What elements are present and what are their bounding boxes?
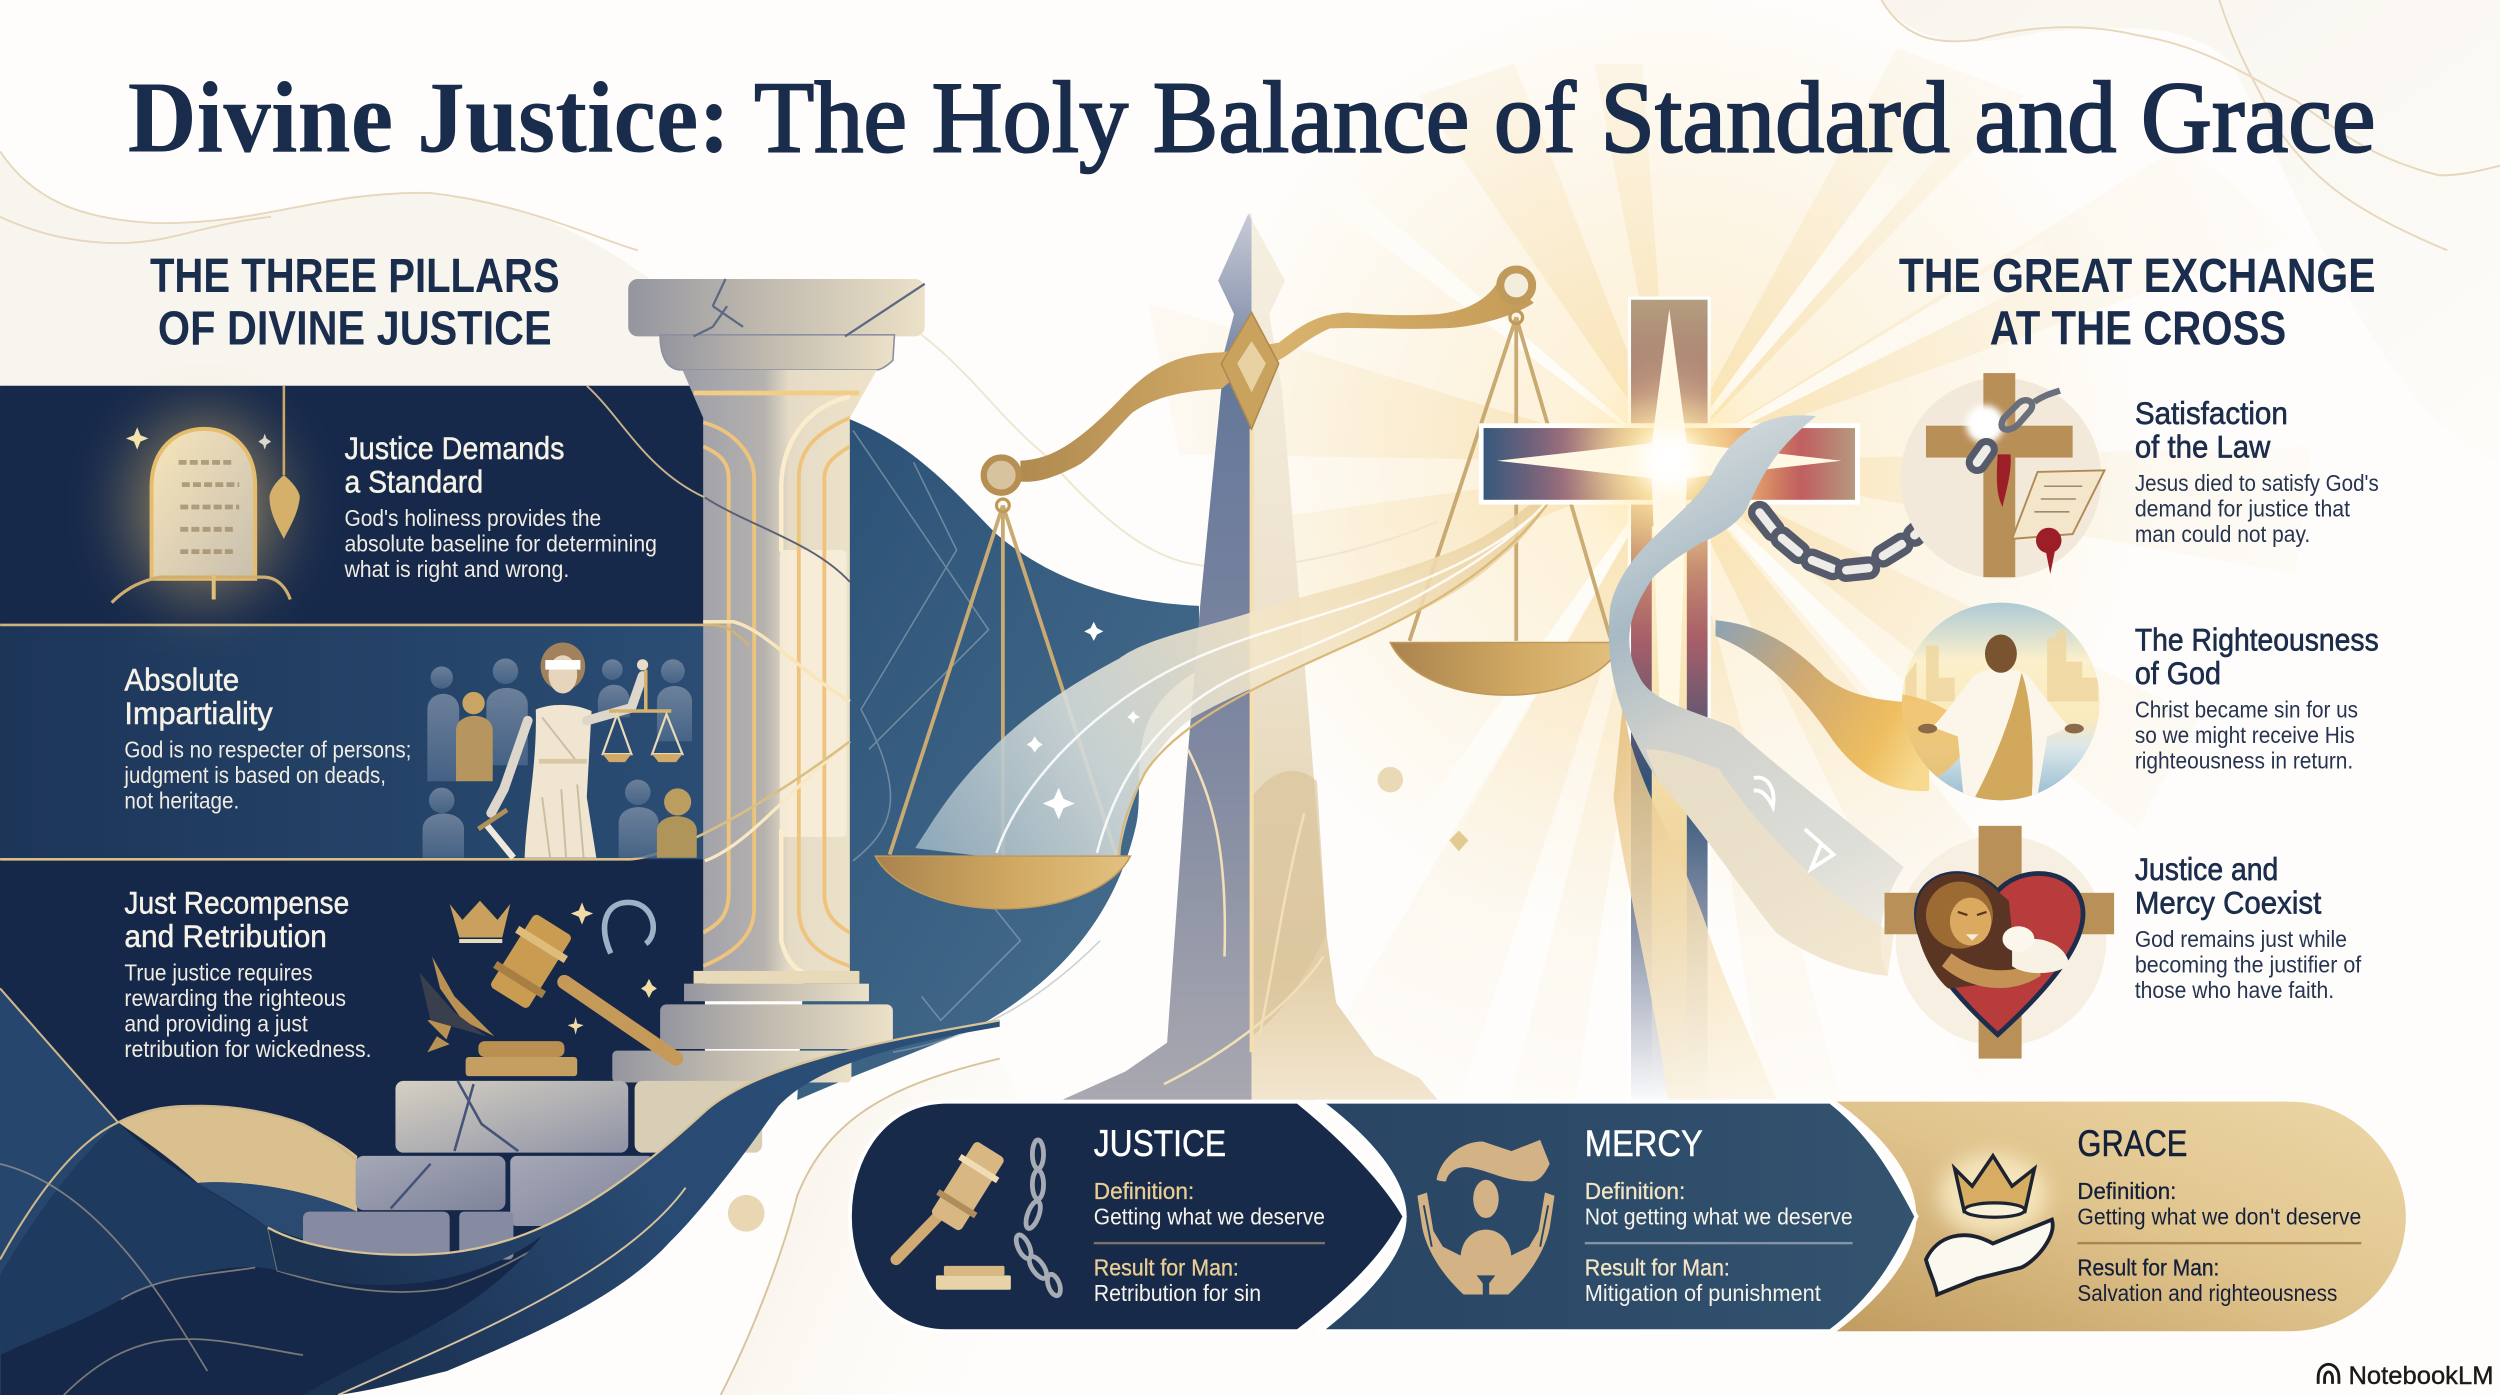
text: righteousness of god [2135,621,2379,773]
stone steps [303,1081,762,1259]
text: justice and mercy coexist: those who have faith. [2135,977,2334,1003]
scale beam and left pan strings [890,269,1610,855]
heading: three pillars: THE THREE PILLARS [150,250,560,303]
notebooklm logo: NotebookLM [2348,1363,2494,1390]
text: absolute impartiality: God is no respecter of persons; [124,736,411,762]
grace text: Definition: [2077,1178,2176,1204]
text: justice demands a standard: God's holiness provides the [344,505,601,531]
stone column [612,279,925,1083]
text: satisfaction of the law: man could not pay. [2135,521,2310,547]
grace text: Result for Man: [2077,1254,2219,1280]
grace text: Salvation and righteousness [2077,1280,2337,1306]
divider lines on the panels [0,386,850,859]
text: absolute impartiality: not heritage. [124,787,239,813]
text: absolute impartiality: Impartiality [124,695,273,731]
text: righteousness of god: so we might receive His [2135,722,2355,748]
text: satisfaction of the law: Satisfaction [2135,395,2288,431]
icon: gavel, crown and broken shackle [419,901,676,1076]
mercy text: Not getting what we deserve [1585,1203,1853,1229]
text: righteousness of god: The Righteousness [2135,621,2379,657]
text: justice and mercy coexist: God remains just while [2135,926,2347,952]
mercy text: Result for Man: [1585,1254,1730,1280]
mercy text [1585,1123,1853,1306]
text: justice and mercy coexist: Mercy Coexist [2135,885,2321,921]
lower-left waves and gold hill [0,988,702,1395]
right scale pan [1390,642,1623,695]
justice text: Retribution for sin [1094,1280,1261,1306]
text: justice and mercy coexist: Justice and [2135,851,2278,887]
text: just recompense and retribution: retribution for wickedness. [124,1036,372,1062]
gold ribbon to the righteousness circle [1716,620,1929,791]
sparkles on ribbon [1027,622,1140,819]
mercy text: Definition: [1585,1178,1685,1204]
justice text: Definition: [1094,1178,1194,1204]
panel: justice [850,1102,1405,1331]
text: justice demands a standard: Justice Demands [344,430,564,466]
light rays behind the cross [1148,0,2312,1148]
heading: great exchange [1899,250,2376,355]
left navy field [0,386,765,1395]
panel: pillar 3 background [0,859,705,1067]
curving band below steps [268,1020,1000,1395]
justice text: JUSTICE [1094,1123,1226,1164]
text: satisfaction of the law: of the Law [2135,429,2271,465]
icon: gavel and broken chain [896,1138,1063,1297]
text: justice demands a standard: absolute baseline for determining [344,531,657,557]
text: just recompense and retribution: True justice requires [124,959,313,985]
silver ribbon around the cross [1609,415,1904,976]
mercy text: MERCY [1585,1123,1703,1164]
text: satisfaction of the law: Jesus died to satisfy God's [2135,470,2379,496]
lower gold ribbon [1613,670,1802,1180]
flowing grace ribbon [915,475,1566,861]
heading: three pillars [150,250,560,355]
text: justice demands a standard [344,430,657,582]
panel: mercy [1320,1102,1916,1331]
panel: grace [1837,1102,2406,1331]
icon: blindfolded Lady Justice with crowd [423,642,697,858]
text: justice and mercy coexist: becoming the justifier of [2135,952,2362,978]
text: absolute impartiality: judgment is based on deads, [124,762,386,788]
text: just recompense and retribution [124,885,372,1062]
text: just recompense and retribution: rewarding the righteous [124,985,346,1011]
grace text: GRACE [2077,1123,2187,1164]
text: just recompense and retribution: and Retribution [124,918,327,954]
panel: pillar 1 background [0,386,705,625]
text: justice demands a standard: a Standard [344,464,483,500]
icon: satisfaction of the law [1900,373,2105,579]
panel: pillar 2 background [0,625,705,859]
icon: crown over open hand [1926,1154,2053,1295]
text: justice and mercy coexist [2135,851,2362,1003]
text: justice demands a standard: what is right and wrong. [344,556,569,582]
mercy text: Mitigation of punishment [1585,1280,1821,1306]
text: satisfaction of the law [2135,395,2379,547]
title: Divine Justice: [128,61,730,174]
blue wave behind the scale [797,335,1438,1100]
text: righteousness of god: righteousness in return. [2135,747,2353,773]
grace text [2077,1123,2361,1306]
text: just recompense and retribution: Just Recompense [124,885,349,921]
text: righteousness of god: Christ became sin for us [2135,696,2358,722]
heading: great exchange: THE GREAT EXCHANGE [1899,250,2376,303]
justice text [1094,1123,1325,1306]
icon: stone tablet and plumb line [112,386,300,603]
justice text: Getting what we deserve [1094,1203,1325,1229]
icon: robed Christ in the righteousness circle [1897,598,2105,805]
left scale pan [875,856,1130,909]
icon: hands protecting a person [1417,1140,1555,1295]
icon: lion and lamb heart on cross [1885,826,2114,1059]
text: righteousness of god: of God [2135,655,2221,691]
central cross [1481,298,1857,1108]
text: absolute impartiality: Absolute [124,661,239,697]
text: satisfaction of the law: demand for justice that [2135,496,2351,522]
text: absolute impartiality [124,661,411,813]
icon: chain from the cross [1748,444,1990,579]
heading: three pillars: OF DIVINE JUSTICE [158,302,552,355]
text: just recompense and retribution: and providing a just [124,1011,308,1037]
heading: great exchange: AT THE CROSS [1990,302,2286,355]
justice text: Result for Man: [1094,1254,1239,1280]
decorative dots [728,767,1468,1232]
scale central post [1062,214,1438,1100]
grace text: Getting what we don't deserve [2077,1203,2361,1229]
title: The Holy Balance of Standard and Grace [754,61,2376,174]
